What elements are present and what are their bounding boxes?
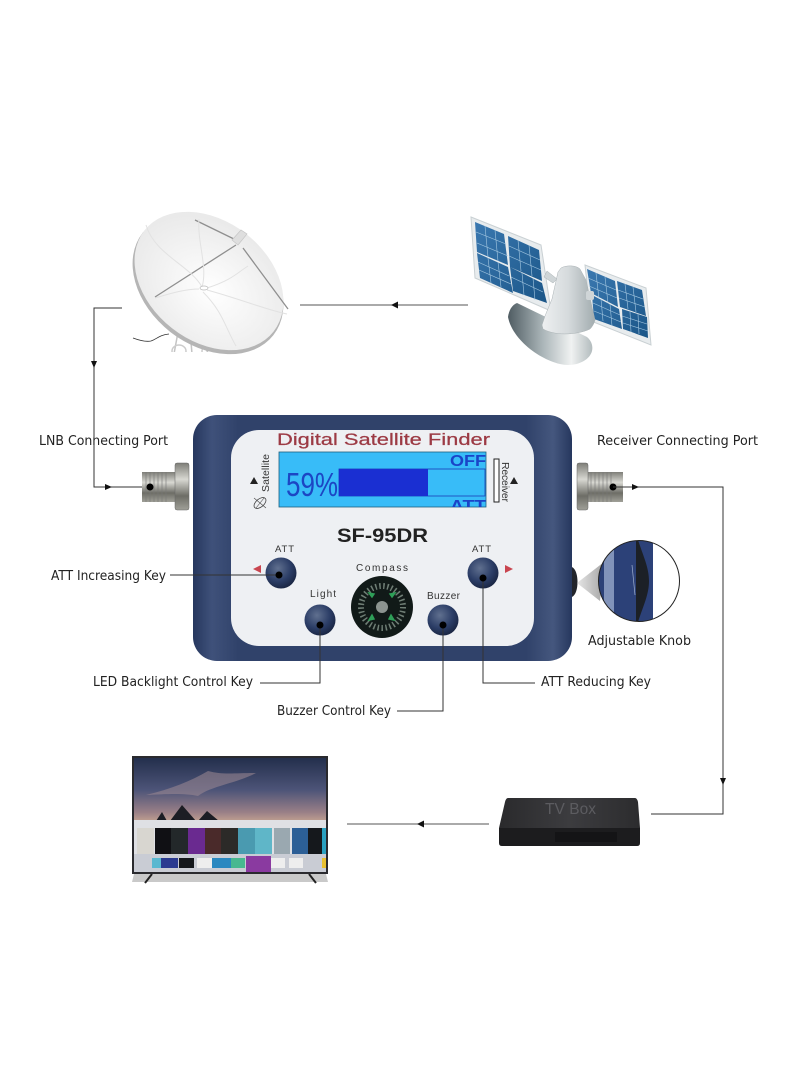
arrow: TV box to television	[347, 820, 489, 828]
buzzer button	[428, 604, 458, 636]
ATT left arrow	[253, 565, 261, 573]
satellite side label: Satellite	[260, 454, 272, 492]
white faceplate	[231, 430, 534, 646]
device body	[193, 415, 572, 661]
label: adjustable knob: Adjustable Knob	[588, 634, 691, 649]
leader: receiver to TV box	[613, 484, 726, 814]
arrow: satellite to dish	[300, 302, 468, 308]
buzzer label: Buzzer	[427, 591, 461, 602]
light button	[304, 604, 336, 636]
icon: TV box	[499, 798, 640, 846]
label: ATT reducing key: ATT Reducing Key	[541, 675, 651, 690]
LCD screen: 59%	[286, 466, 338, 503]
compass label: Compass	[356, 563, 408, 574]
adjustable knob wheel	[572, 567, 578, 597]
callout: adjustable knob magnifier	[577, 540, 680, 622]
light label: Light	[310, 589, 336, 600]
receiver side label: Receiver	[499, 462, 511, 502]
icon: satellite dish	[132, 212, 288, 354]
connector: receiver port	[577, 463, 623, 510]
device title: Digital Satellite Finder	[277, 430, 490, 449]
ATT increasing button	[266, 558, 296, 588]
label: buzzer control key: Buzzer Control Key	[277, 704, 391, 719]
leader: LED backlight key	[260, 622, 324, 683]
device: digital satellite finder	[193, 415, 572, 661]
LCD screen: OFF	[450, 453, 486, 470]
leader: ATT reducing key	[480, 574, 535, 683]
TV box text: TV Box	[545, 801, 596, 818]
arrow: dish to LNB port	[91, 308, 150, 490]
satellite side label	[250, 454, 272, 511]
LCD screen	[278, 452, 486, 508]
LCD screen: ATT	[450, 498, 486, 515]
icon: television	[132, 756, 328, 883]
label: LED backlight control key: LED Backlight Control Key	[93, 675, 253, 690]
compass	[351, 576, 413, 638]
leader: ATT increasing key	[170, 572, 282, 578]
model name: SF-95DR	[337, 525, 428, 547]
leader: buzzer key	[397, 622, 446, 711]
connector: LNB port	[142, 463, 189, 510]
label: ATT increasing key: ATT Increasing Key	[51, 569, 166, 584]
ATT label right: ATT	[472, 544, 491, 555]
ATT right arrow	[505, 565, 513, 573]
icon: satellite	[471, 217, 651, 365]
ATT label left: ATT	[275, 544, 294, 555]
label: LNB connecting port: LNB Connecting Port	[39, 434, 168, 449]
ATT reducing button	[468, 558, 498, 588]
receiver side label	[494, 459, 518, 502]
label: receiver connecting port: Receiver Connecting Port	[597, 434, 758, 449]
